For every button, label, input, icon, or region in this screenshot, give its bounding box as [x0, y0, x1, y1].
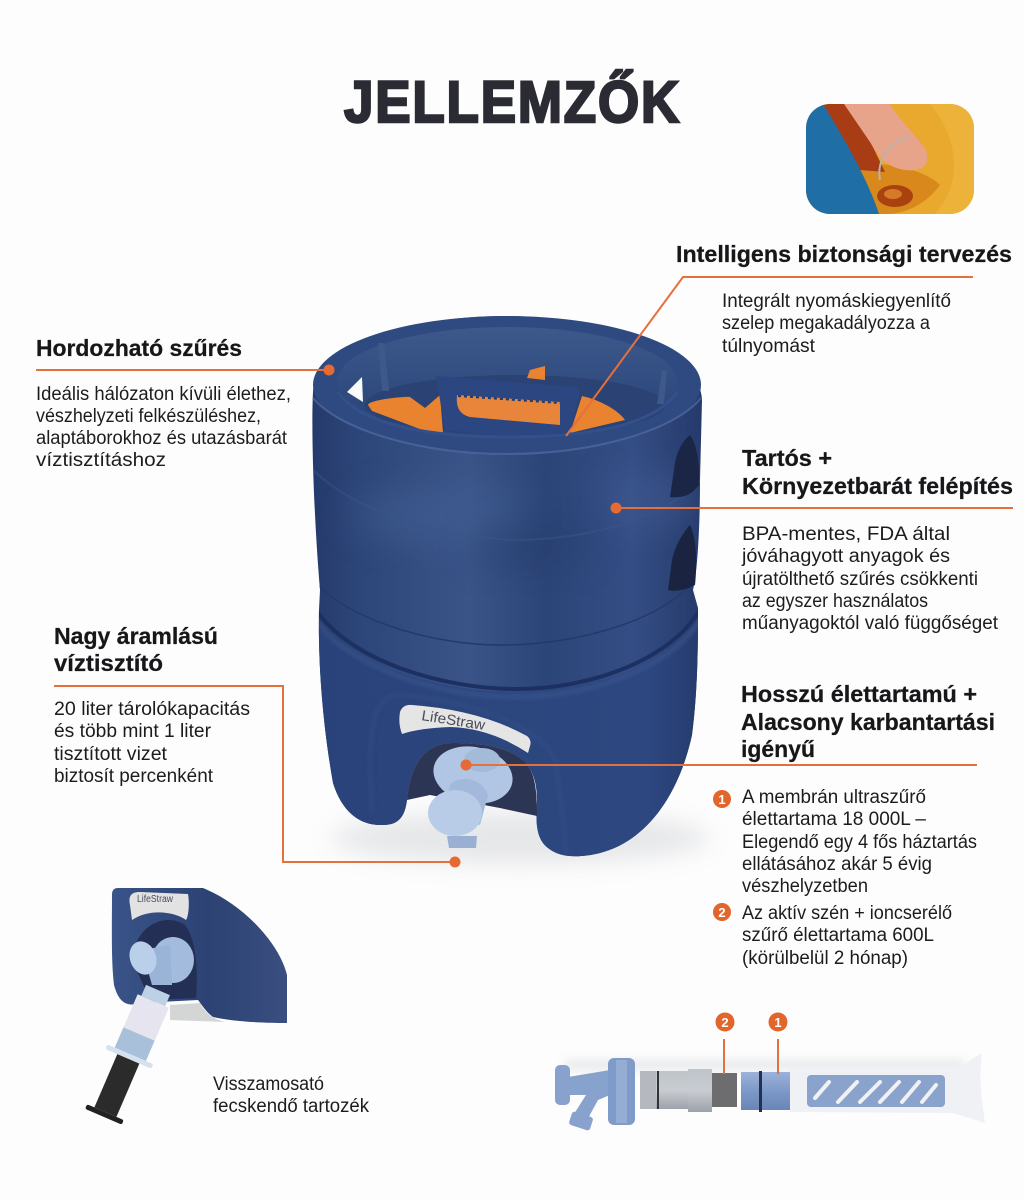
marker 1: 1: [774, 1015, 782, 1030]
connector line: [36, 364, 334, 376]
item 1: vészhelyzetben: [742, 876, 868, 897]
description: [54, 699, 250, 787]
description: vészhelyzeti felkészüléshez,: [36, 406, 261, 427]
description: újratölthető szűrés csökkenti: [742, 569, 978, 590]
handle cut-outs: [670, 435, 699, 497]
description: Ideális hálózaton kívüli élethez,: [36, 384, 291, 405]
marker 2: [716, 1012, 734, 1074]
posts: [378, 343, 389, 391]
keg product illustration: [300, 316, 710, 880]
heading: Nagy áramlású: [54, 623, 218, 649]
panel: durable and eco-friendly: [610, 445, 1013, 634]
description: alaptáborokhoz és utazásbarát: [36, 428, 288, 449]
item 1: [713, 787, 977, 897]
heading: [742, 445, 1013, 499]
panel: intelligent safety design: [566, 241, 1012, 436]
description: szelep megakadályozza a: [722, 313, 930, 334]
heading: [54, 623, 218, 676]
membrane tube: [741, 1071, 791, 1112]
description: Integrált nyomáskiegyenlítő: [722, 291, 951, 312]
item 1: Elegendő egy 4 fős háztartás: [742, 832, 977, 853]
inner wall: [337, 327, 677, 435]
description: [36, 384, 291, 471]
arch interior: [407, 743, 537, 816]
panel: high flow purifier: [54, 623, 460, 868]
inset: keg tap with syringe: [80, 888, 287, 1127]
marker 2: 2: [721, 1015, 729, 1030]
front rim edge: [338, 392, 677, 437]
title: JELLEMZŐK: [344, 70, 681, 135]
filter shadow: [565, 1060, 965, 1070]
heading: Hordozható szűrés: [36, 335, 242, 361]
description: műanyagoktól való függőséget: [742, 613, 999, 634]
description: túlnyomást: [722, 336, 816, 357]
inset label: [129, 892, 189, 920]
inner floor: [365, 375, 665, 435]
orange parts: [368, 395, 443, 433]
brand label: [399, 705, 531, 753]
description: [722, 291, 951, 357]
description: tisztított vizet: [54, 744, 168, 765]
item 2: szűrő élettartama 600L: [742, 925, 934, 946]
keg soft shadow: [330, 812, 710, 864]
left opening: [347, 377, 363, 402]
heading: víztisztító: [54, 650, 163, 676]
syringe caption: [213, 1074, 369, 1117]
description: BPA-mentes, FDA által: [742, 524, 950, 545]
heading: Alacsony karbantartási: [741, 709, 995, 735]
inset keg: [112, 888, 287, 1023]
connector line: [566, 277, 973, 436]
syringe caption: fecskendő tartozék: [213, 1096, 369, 1117]
inset: keg tap with syringe: LifeStraw: [137, 894, 174, 905]
description: víztisztításhoz: [36, 450, 166, 471]
heading: Hosszú élettartamú +: [741, 681, 977, 707]
panel: portable filtration: [36, 335, 334, 471]
item 2: Az aktív szén + ioncserélő: [742, 903, 952, 924]
description: 20 liter tárolókapacitás: [54, 699, 250, 720]
inset floor shadow: [170, 1003, 225, 1022]
gray housing: [640, 1069, 712, 1112]
item 1: élettartama 18 000L –: [742, 809, 926, 830]
brand label: LifeStraw: [420, 708, 487, 734]
Y connector: [555, 1058, 635, 1131]
item 2: (körülbelül 2 hónap): [742, 948, 908, 969]
heading: [741, 681, 995, 762]
description: az egyszer használatos: [742, 591, 928, 612]
exploded filter diagram: [555, 1012, 985, 1131]
spigot: [428, 739, 518, 848]
rim: [313, 316, 701, 454]
heading: igényű: [741, 736, 815, 762]
heading: Környezetbarát felépítés: [742, 473, 1013, 499]
connector line: [54, 686, 460, 868]
description: [741, 524, 999, 634]
description: jóváhagyott anyagok és: [741, 546, 950, 567]
heading: Intelligens biztonsági tervezés: [676, 241, 1012, 267]
connector line: [460, 760, 977, 770]
syringe caption: Visszamosató: [213, 1074, 324, 1095]
item 2: [713, 903, 952, 969]
inset tap: [125, 937, 194, 985]
heading: Tartós +: [742, 445, 832, 471]
filter bag: [790, 1053, 985, 1123]
description: és több mint 1 liter: [54, 721, 212, 742]
marker 1: [768, 1012, 788, 1074]
item 1: A membrán ultraszűrő: [742, 787, 926, 808]
description: biztosít percenként: [54, 766, 214, 787]
central handle: [436, 376, 580, 436]
panel: long life and low maintenance: [460, 681, 995, 969]
photo: pressure valve ring: [806, 104, 974, 214]
item 2: 2: [718, 905, 726, 920]
syringe: [80, 980, 181, 1127]
carbon filter: [712, 1073, 737, 1107]
keg silhouette: [312, 316, 702, 856]
connector line: [610, 502, 1013, 514]
item 1: 1: [718, 792, 726, 807]
inset arch: [132, 920, 197, 1000]
item 1: ellátásához akár 5 évig: [742, 854, 932, 875]
